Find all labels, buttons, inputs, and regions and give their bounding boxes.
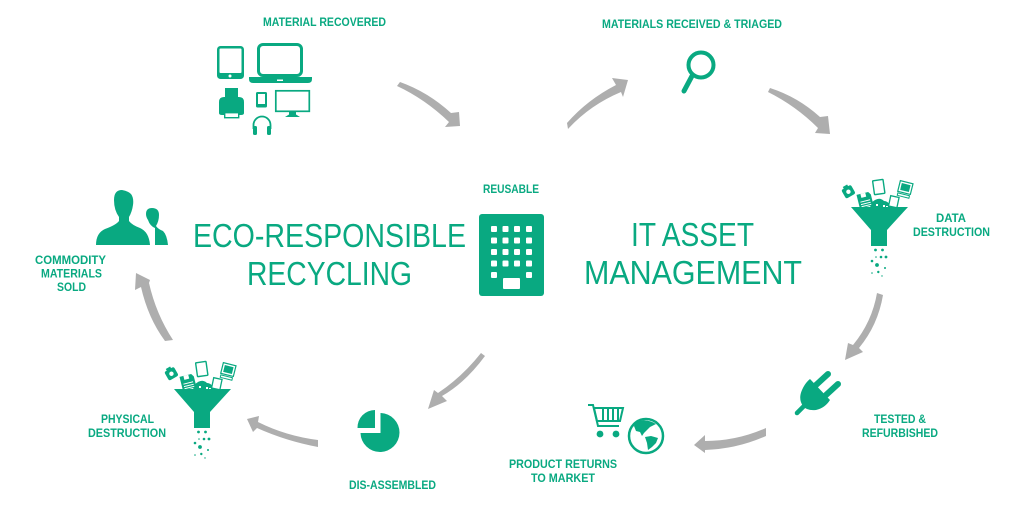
icon: magnifying glass [684,52,714,91]
icon: data destruction funnel [840,179,913,277]
arrow: material recovered to reusable [397,82,460,127]
label: materials received and triaged: MATERIALS RECEIVED & TRIAGED [602,19,782,31]
arrow: triaged to data destruction [768,88,830,134]
icon: building [479,214,544,296]
icon: pie chart [357,410,399,452]
heading: it asset management: IT ASSET [631,216,754,253]
label: tested and refurbished: REFURBISHED [862,428,938,440]
label: product returns to market: PRODUCT RETURNS [509,459,617,471]
label: material recovered: MATERIAL RECOVERED [263,17,386,29]
icon: shopping cart [588,405,623,437]
arrow: tested to product returns [694,428,766,453]
icon: plug [797,374,838,413]
label: data destruction: DATA [936,213,966,225]
icon: physical destruction funnel [163,361,236,459]
label: commodity materials sold: SOLD [57,282,86,294]
heading: it asset management: MANAGEMENT [584,254,802,291]
arrow: physical destruction to commodity [135,273,173,341]
arrow: data destruction to tested [845,293,883,360]
label: commodity materials sold [35,255,106,294]
heading: it asset management [584,216,802,291]
label: data destruction: DESTRUCTION [913,227,990,239]
label: product returns to market [509,459,617,485]
label: reusable: REUSABLE [483,184,539,196]
arrow: reusable to materials received [567,78,628,129]
label: commodity materials sold: MATERIALS [41,268,102,280]
arrow: reusable to dis-assembled [428,353,485,409]
label: physical destruction: DESTRUCTION [88,428,166,440]
heading: eco-responsible recycling: ECO-RESPONSIBLE [193,217,466,254]
label: commodity materials sold: COMMODITY [35,255,106,267]
label: physical destruction: PHYSICAL [101,414,154,426]
label: product returns to market: TO MARKET [531,473,595,485]
label: tested and refurbished [862,414,938,440]
icon: devices [217,44,312,135]
label: data destruction [913,213,990,239]
arrow: dis-assembled to physical destruction [247,416,318,447]
icon: people [96,190,168,245]
label: tested and refurbished: TESTED & [874,414,926,426]
label: dis-assembled: DIS-ASSEMBLED [349,480,436,492]
label: physical destruction [88,414,166,440]
icon: globe [629,419,663,453]
heading: eco-responsible recycling [193,217,466,292]
heading: eco-responsible recycling: RECYCLING [247,255,412,292]
